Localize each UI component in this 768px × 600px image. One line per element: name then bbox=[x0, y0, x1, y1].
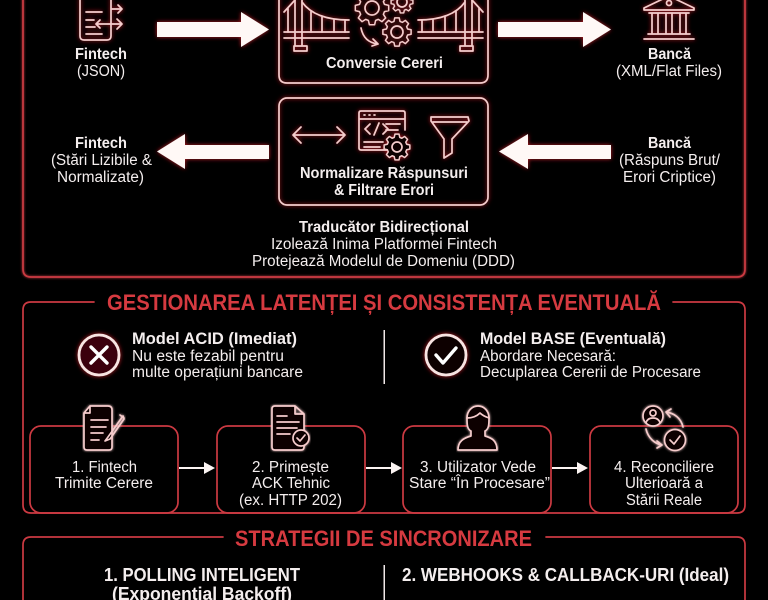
text block: bidirectional translator: Izolează Inima Platformei Fintech bbox=[271, 236, 497, 253]
label: Normalizare Raspunsuri: & Filtrare Erori bbox=[334, 182, 434, 199]
label: Bank raw response bbox=[619, 135, 721, 186]
label: Bank XML bbox=[616, 46, 722, 80]
icon: user bbox=[458, 406, 497, 450]
label: step 4: 4. Reconciliere bbox=[614, 459, 714, 476]
icon: fintech JSON document bbox=[80, 0, 122, 40]
icon: double arrow bbox=[293, 127, 345, 143]
text block: BASE model: Decuplarea Cererii de Procesare bbox=[480, 364, 701, 381]
label: step 3: 3. Utilizator Vede bbox=[420, 459, 536, 476]
icon: reconciliation cycle bbox=[643, 406, 686, 450]
label: step 2 bbox=[239, 459, 342, 509]
icon: conversion gears bbox=[355, 0, 413, 46]
icon: document with check bbox=[272, 406, 309, 450]
label: step 3: Stare “În Procesare” bbox=[409, 475, 550, 492]
icon: accepted bbox=[426, 335, 466, 375]
label: Normalizare Raspunsuri: Normalizare Răspunsuri bbox=[300, 165, 468, 182]
label: step 1: Trimite Cerere bbox=[55, 475, 153, 492]
text block: webhooks: 2. WEBHOOKS & CALLBACK-URI (Ideal) bbox=[402, 564, 729, 585]
panel: sync strategies bbox=[23, 526, 745, 600]
label: Normalizare Raspunsuri bbox=[300, 165, 468, 199]
step 3: user sees processing state bbox=[403, 406, 551, 513]
text block: ACID model: Model ACID (Imediat) bbox=[132, 329, 297, 348]
label: Conversie Cereri: Conversie Cereri bbox=[326, 55, 443, 72]
divider: strategies bbox=[384, 565, 385, 600]
heading: latency: GESTIONAREA LATENȚEI ȘI CONSISTENȚA EVENTUALĂ bbox=[107, 290, 661, 315]
text block: ACID model: Nu este fezabil pentru bbox=[132, 348, 284, 365]
text block: ACID model: multe operațiuni bancare bbox=[132, 364, 303, 381]
divider: models bbox=[384, 330, 385, 384]
panel: bidirectional translator bbox=[23, 0, 745, 277]
arrow: step 3 to 4 bbox=[552, 462, 588, 474]
text block: intelligent polling bbox=[104, 564, 301, 600]
icon: rejected bbox=[79, 335, 119, 375]
label: step 2: (ex. HTTP 202) bbox=[239, 492, 342, 509]
label: step 4: Stării Reale bbox=[626, 492, 702, 509]
label: Bank XML: Bancă bbox=[648, 46, 691, 63]
icon: document with pen bbox=[84, 406, 124, 450]
label: step 4: Ulterioară a bbox=[625, 475, 703, 492]
label: Bank raw response: (Răspuns Brut/ bbox=[619, 152, 721, 169]
arrow: normalization to fintech bbox=[157, 134, 269, 169]
text block: bidirectional translator: Protejează Modelul de Domeniu (DDD) bbox=[252, 253, 515, 270]
label: Fintech JSON: (JSON) bbox=[77, 63, 125, 80]
panel: latency and eventual consistency bbox=[23, 290, 745, 513]
label: Fintech readable states: (Stări Lizibile & bbox=[51, 152, 153, 169]
label: Bank XML: (XML/Flat Files) bbox=[616, 63, 722, 80]
label: Fintech JSON bbox=[75, 46, 127, 80]
text block: BASE model: Abordare Necesară: bbox=[480, 348, 616, 365]
heading: sync strategies: STRATEGII DE SINCRONIZARE bbox=[235, 526, 532, 551]
text block: BASE model bbox=[480, 329, 701, 381]
text block: bidirectional translator bbox=[252, 219, 515, 270]
icon: bank bbox=[644, 0, 694, 39]
label: step 4 bbox=[614, 459, 714, 509]
label: step 3 bbox=[409, 459, 550, 492]
text block: ACID model bbox=[132, 329, 303, 381]
label: Bank raw response: Bancă bbox=[648, 135, 691, 152]
text block: intelligent polling: 1. POLLING INTELIGENT bbox=[104, 564, 301, 585]
arrow: conversion to bank bbox=[498, 12, 611, 47]
label: Fintech JSON: Fintech bbox=[75, 46, 127, 63]
icon: right bridge bbox=[418, 0, 483, 51]
label: Bank raw response: Erori Criptice) bbox=[623, 169, 716, 186]
label: step 2: ACK Tehnic bbox=[252, 475, 330, 492]
arrow: step 1 to 2 bbox=[179, 462, 215, 474]
arrow: fintech to conversion bbox=[157, 12, 269, 47]
icon: code window with gear bbox=[359, 111, 410, 160]
step 2: technical ACK bbox=[217, 406, 365, 513]
label: step 2: 2. Primește bbox=[252, 459, 329, 476]
label: step 1: 1. Fintech bbox=[72, 459, 137, 476]
text block: bidirectional translator: Traducător Bidirecțional bbox=[299, 219, 469, 236]
box: response normalization bbox=[279, 98, 488, 205]
icon: left bridge bbox=[284, 0, 349, 51]
text block: BASE model: Model BASE (Eventuală) bbox=[480, 329, 666, 348]
label: Fintech readable states: Fintech bbox=[75, 135, 127, 152]
arrow: bank to normalization bbox=[499, 134, 611, 169]
icon: filter funnel bbox=[431, 117, 469, 158]
arrow: step 2 to 3 bbox=[366, 462, 402, 474]
label: Fintech readable states bbox=[51, 135, 153, 186]
label: Fintech readable states: Normalizate) bbox=[57, 169, 144, 186]
step 1: fintech sends request bbox=[30, 406, 178, 513]
box: request conversion bbox=[279, 0, 488, 83]
label: step 1 bbox=[55, 459, 153, 492]
step 4: later reconciliation bbox=[590, 406, 738, 513]
